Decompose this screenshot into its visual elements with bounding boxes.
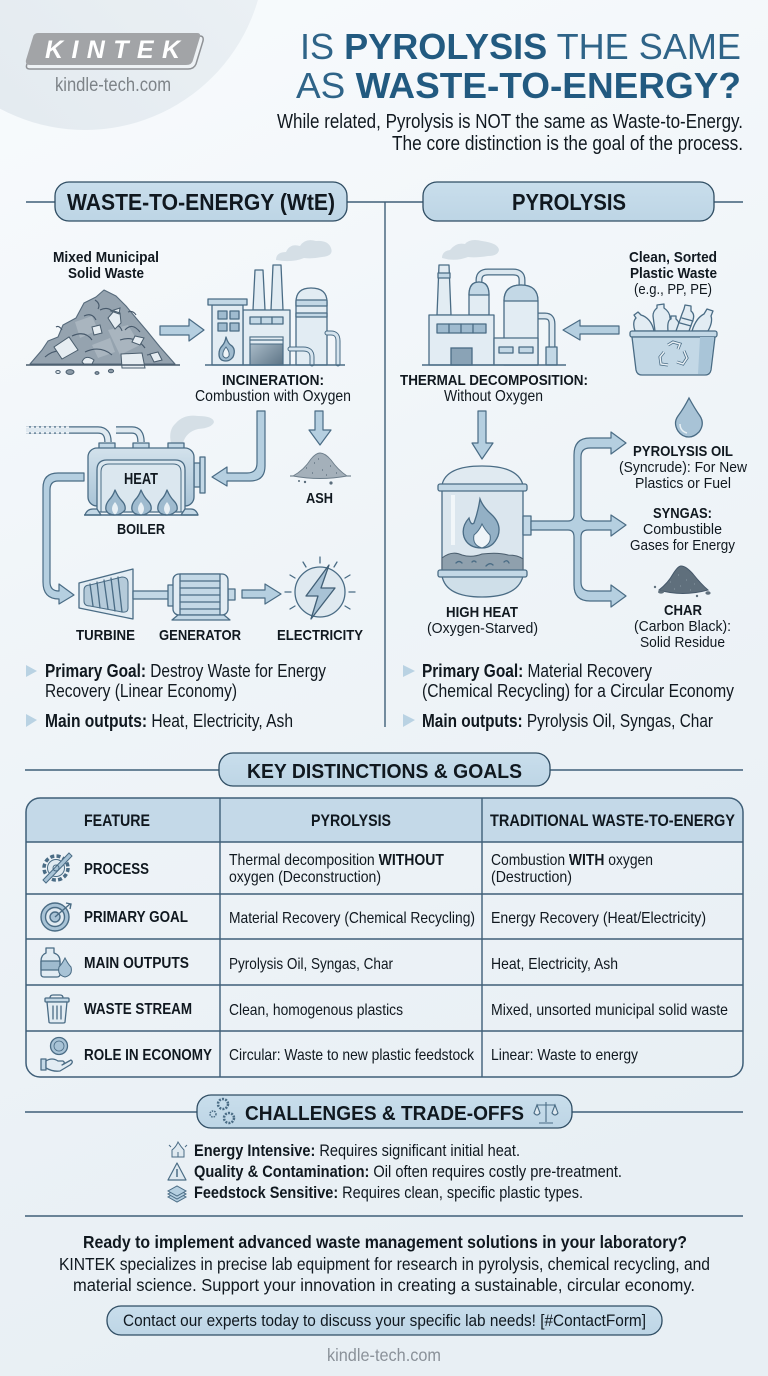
labels: turbine, generator, electricity: ELECTRICITY: [277, 627, 363, 644]
label: clean sorted plastic waste: (e.g., PP, PE): [634, 281, 712, 298]
icon: basket of plastic bottles: [630, 304, 717, 375]
label: syngas: [630, 505, 735, 554]
icon: bottle and drop: [41, 948, 71, 977]
icon: stacked layers: [168, 1186, 186, 1202]
label: mixed municipal solid waste: Mixed Municipal: [53, 249, 159, 266]
icon: shaft and generator: [133, 574, 235, 620]
contact button: Contact our experts today to discuss your specific lab needs! [#ContactForm]: [123, 1311, 646, 1330]
row: waste stream: Mixed, unsorted municipal solid waste: [491, 1002, 728, 1019]
label: high heat: HIGH HEAT: [446, 604, 518, 621]
label: clean sorted plastic waste: Plastic Waste: [630, 265, 717, 282]
icon: pyrolysis plant: [422, 265, 566, 365]
logo url: kindle-tech.com: [55, 75, 171, 96]
arrow: generator to electricity: [242, 584, 281, 604]
list: challenges: [168, 1142, 622, 1202]
arrow: waste to incineration: [160, 319, 204, 341]
label: thermal decomposition: Without Oxygen: [444, 388, 543, 405]
bullet: primary goal: Primary Goal: Material Recovery: [422, 661, 652, 681]
icon: char pile: [654, 566, 711, 597]
heading: pyrolysis: [423, 182, 714, 221]
icon: gears: [210, 1099, 234, 1123]
icon: target: [41, 903, 71, 931]
row: role in economy: [84, 1047, 638, 1064]
bullet: main outputs: Main outputs: Heat, Electricity, Ash: [45, 711, 293, 731]
bullet: primary goal: [403, 661, 734, 701]
title: IS PYROLYSIS THE SAME: [300, 26, 741, 67]
table header: TRADITIONAL WASTE-TO-ENERGY: [490, 811, 736, 830]
panel: pyrolysis process: [400, 240, 747, 731]
label: thermal decomposition: [400, 372, 588, 405]
arrow: incineration to boiler: [212, 411, 265, 486]
logo: KINTEK: [26, 33, 203, 69]
label: pyrolysis oil: PYROLYSIS OIL: [633, 443, 733, 460]
heading: waste-to-energy: WASTE-TO-ENERGY (WtE): [67, 189, 335, 215]
row: primary goal: Energy Recovery (Heat/Electricity): [491, 910, 706, 927]
row: process: (Destruction): [491, 869, 572, 886]
labels: turbine, generator, electricity: [76, 627, 363, 644]
item: feedstock sensitive: Feedstock Sensitive: Requires clean, specific plastic types.: [194, 1184, 583, 1202]
row: primary goal: [84, 909, 706, 927]
table header: FEATURE: [84, 811, 150, 830]
heading: key distinctions and goals: KEY DISTINCTIONS & GOALS: [247, 761, 522, 783]
label: high heat: [427, 604, 538, 637]
label: incineration: Combustion with Oxygen: [195, 388, 351, 405]
row: waste stream: Clean, homogenous plastics: [229, 1002, 403, 1019]
arrows: reactor outputs: [531, 432, 626, 607]
icon: warning triangle: [168, 1163, 186, 1180]
icon: smoke cloud: [442, 240, 499, 260]
label: pyrolysis oil: Plastics or Fuel: [635, 475, 731, 492]
row: waste stream: [84, 1001, 728, 1019]
row: main outputs: Pyrolysis Oil, Syngas, Char: [229, 956, 394, 973]
label: clean sorted plastic waste: Clean, Sorted: [629, 249, 717, 266]
row: role in economy: Circular: Waste to new plastic feedstock: [229, 1047, 475, 1064]
label: incineration: INCINERATION:: [222, 372, 324, 389]
label: boiler: BOILER: [117, 521, 165, 538]
row: waste stream: WASTE STREAM: [84, 1001, 192, 1018]
contact button: [107, 1306, 662, 1335]
icon: boiler: [26, 416, 214, 515]
heading: waste-to-energy: [55, 182, 347, 221]
row: role in economy: ROLE IN ECONOMY: [84, 1047, 212, 1064]
row: process: [84, 852, 653, 886]
labels: turbine, generator, electricity: TURBINE: [76, 627, 135, 644]
heading: key distinctions and goals: [219, 753, 550, 786]
label: ash: ASH: [306, 490, 333, 507]
row: process: Combustion WITH oxygen: [491, 852, 653, 869]
row: main outputs: [84, 955, 618, 973]
row: primary goal: Material Recovery (Chemical Recycling): [229, 910, 475, 927]
row: process: oxygen (Deconstruction): [229, 869, 381, 886]
label: syngas: SYNGAS:: [653, 505, 712, 522]
heading: pyrolysis: PYROLYSIS: [512, 189, 626, 215]
icon: flame house: [169, 1142, 187, 1157]
panel: waste-to-energy process: [26, 240, 363, 731]
table header: [84, 811, 736, 830]
row: primary goal: PRIMARY GOAL: [84, 909, 188, 926]
label: high heat: (Oxygen-Starved): [427, 620, 538, 637]
item: energy intensive: Energy Intensive: Requires significant initial heat.: [194, 1142, 520, 1160]
label: pyrolysis oil: (Syncrude): For New: [619, 459, 747, 476]
item: quality and contamination: Quality & Contamination: Oil often requires costly pre-treatment.: [194, 1163, 622, 1181]
call to action text: material science. Support your innovation in creating a sustainable, circular economy.: [73, 1275, 695, 1295]
bullet: main outputs: Main outputs: Pyrolysis Oil, Syngas, Char: [422, 711, 713, 731]
table header: PYROLYSIS: [311, 811, 391, 830]
icon: oil drop: [676, 398, 702, 437]
icon: gear and wrench: [43, 853, 72, 883]
title: [296, 26, 741, 106]
call to action text: Ready to implement advanced waste management solutions in your laboratory?: [83, 1232, 687, 1252]
label: char: CHAR: [664, 602, 702, 619]
label: char: [634, 602, 731, 651]
icon: waste pile: [26, 290, 180, 374]
label: mixed municipal solid waste: [53, 249, 159, 282]
labels: turbine, generator, electricity: GENERATOR: [159, 627, 241, 644]
icon: hand with coin: [41, 1038, 72, 1071]
subtitle: [277, 111, 743, 155]
row: process: PROCESS: [84, 861, 149, 878]
label: char: (Carbon Black):: [634, 618, 731, 635]
label: thermal decomposition: THERMAL DECOMPOSITION:: [400, 372, 588, 389]
title: AS WASTE-TO-ENERGY?: [296, 65, 741, 106]
call to action text: [59, 1232, 710, 1295]
footer url: kindle-tech.com: [327, 1345, 441, 1365]
icon: balance scales: [534, 1102, 558, 1123]
heading: challenges and trade-offs: [197, 1095, 572, 1128]
label: mixed municipal solid waste: Solid Waste: [68, 265, 144, 282]
icon: turbine: [79, 569, 133, 619]
heading: challenges and trade-offs: CHALLENGES & TRADE-OFFS: [245, 1103, 524, 1125]
call to action text: KINTEK specializes in precise lab equipment for research in pyrolysis, chemical recycling, and: [59, 1254, 710, 1274]
icon: reactor: [438, 466, 531, 597]
logo: KINTEK: KINTEK: [45, 36, 182, 64]
row: main outputs: MAIN OUTPUTS: [84, 955, 189, 972]
label: pyrolysis oil: [619, 443, 747, 492]
icon: trash bin: [45, 995, 69, 1023]
bullet: primary goal: Primary Goal: Destroy Waste for Energy: [45, 661, 326, 681]
label: clean sorted plastic waste: [629, 249, 717, 298]
row: role in economy: Linear: Waste to energy: [491, 1047, 638, 1064]
label: syngas: Gases for Energy: [630, 537, 735, 554]
arrow: boiler to turbine: [43, 473, 84, 604]
label: incineration: [195, 372, 351, 405]
arrow: incineration to ash: [309, 411, 331, 445]
icon: smoke cloud: [276, 240, 332, 261]
arrow: plastic to plant: [563, 320, 619, 340]
arrow: plant to reactor: [472, 411, 493, 459]
label: syngas: Combustible: [643, 521, 722, 538]
icon: boiler: HEAT: [124, 471, 158, 488]
icon: ash pile: [290, 453, 351, 485]
bullet: primary goal: [26, 661, 326, 701]
comparison table: [26, 798, 743, 1077]
bullet: primary goal: Recovery (Linear Economy): [45, 681, 237, 701]
row: process: Thermal decomposition WITHOUT: [229, 852, 444, 869]
label: char: Solid Residue: [640, 634, 725, 651]
icon: electricity bolt: [285, 557, 355, 619]
icon: incineration plant: [205, 265, 345, 365]
row: main outputs: Heat, Electricity, Ash: [491, 956, 618, 973]
